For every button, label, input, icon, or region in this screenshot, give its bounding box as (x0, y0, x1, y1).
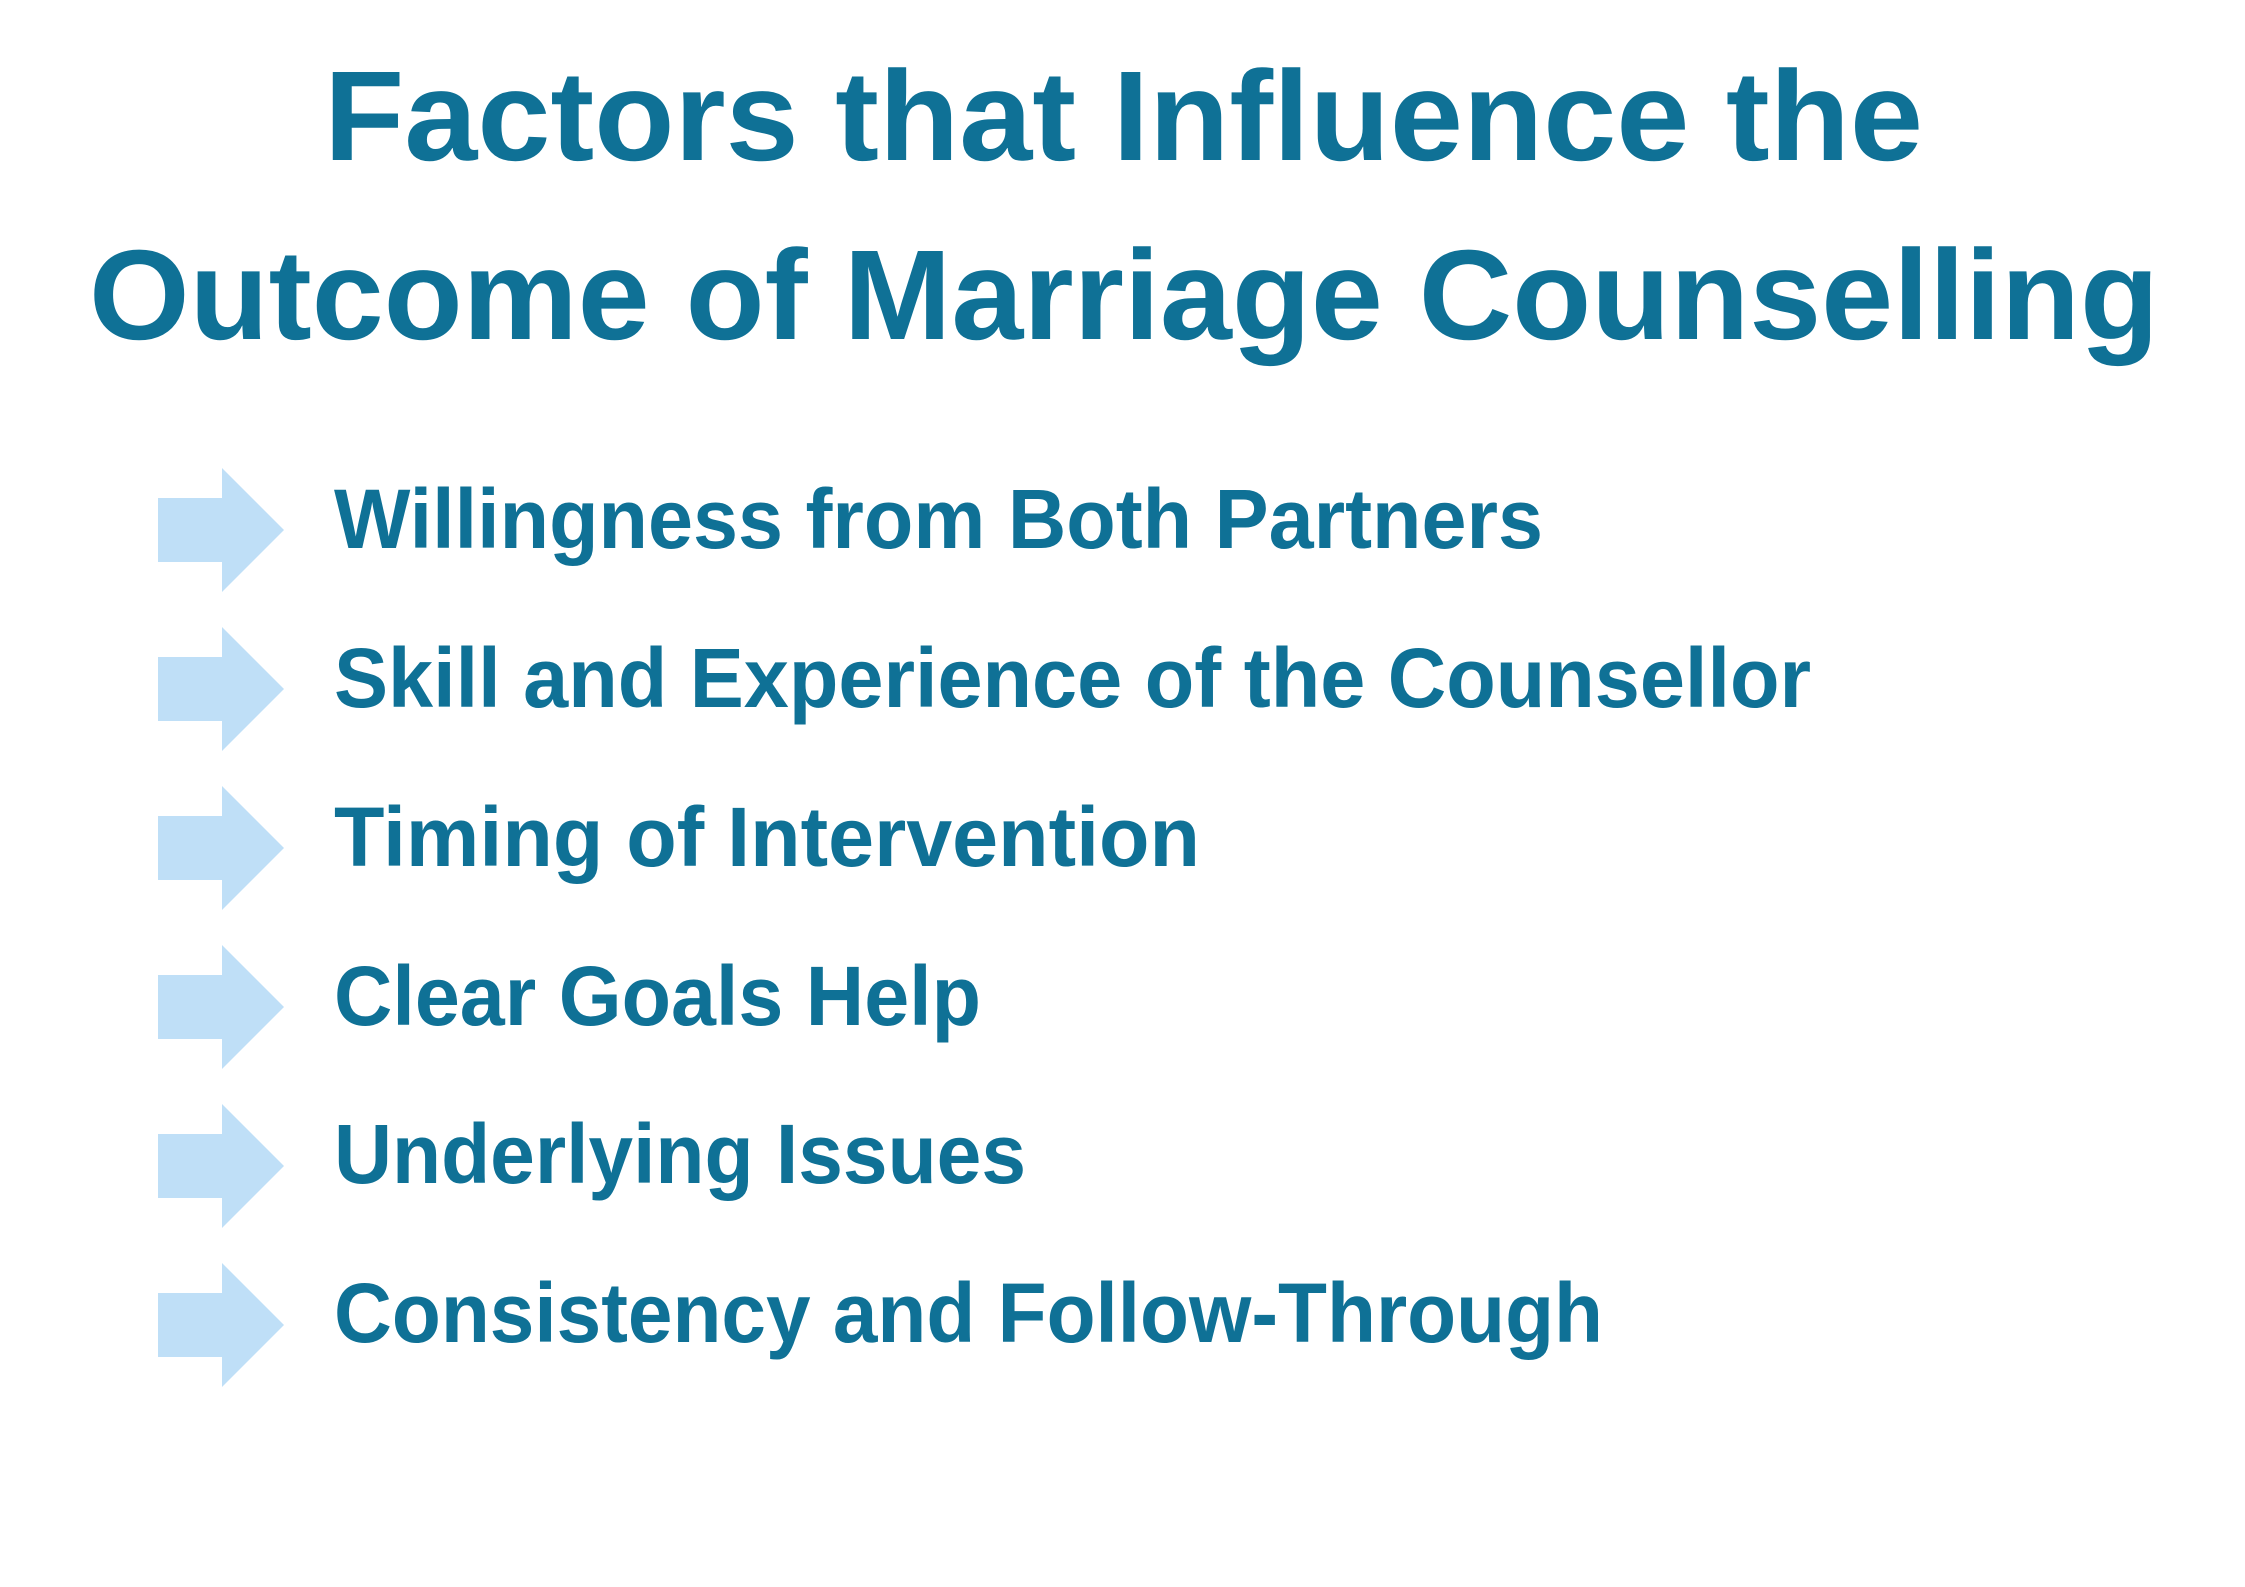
item 3 (158, 786, 1200, 910)
item 1 (158, 468, 1543, 592)
item 1: Willingness from Both Partners (334, 472, 1543, 566)
item 5: Underlying Issues (334, 1107, 1026, 1201)
item 6 (158, 1263, 1603, 1387)
item 2 (158, 627, 1811, 751)
item 3: Timing of Intervention (334, 790, 1200, 884)
list: factors (158, 468, 1811, 1387)
title (89, 45, 2159, 367)
item 2: Skill and Experience of the Counsellor (334, 631, 1811, 725)
item 4: Clear Goals Help (334, 949, 981, 1043)
icon: arrow 3 (158, 786, 284, 910)
icon: arrow 4 (158, 945, 284, 1069)
icon: arrow 5 (158, 1104, 284, 1228)
title: Outcome of Marriage Counselling (89, 224, 2159, 367)
item 5 (158, 1104, 1026, 1228)
item 4 (158, 945, 981, 1069)
item 6: Consistency and Follow-Through (334, 1266, 1603, 1360)
icon: arrow 2 (158, 627, 284, 751)
icon: arrow 6 (158, 1263, 284, 1387)
icon: arrow 1 (158, 468, 284, 592)
title: Factors that Influence the (324, 45, 1923, 188)
